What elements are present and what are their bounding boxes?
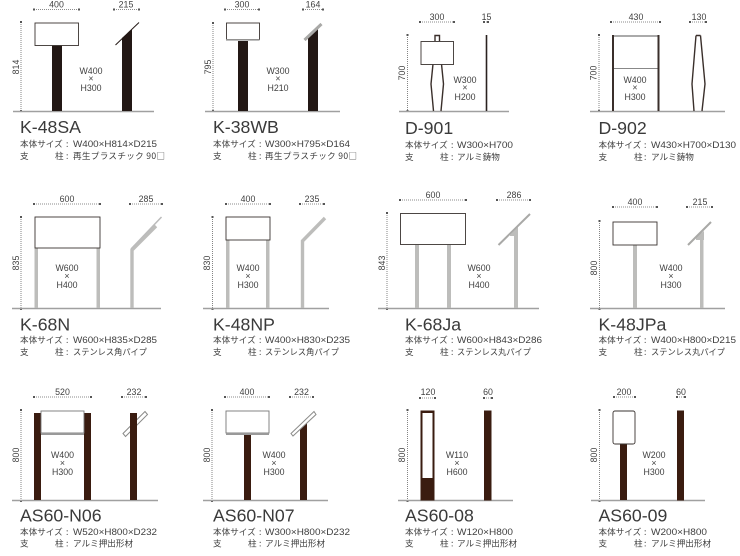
front and side drawing	[205, 23, 340, 112]
specifications: 支	[20, 150, 29, 162]
specifications: 支	[405, 346, 414, 358]
specifications	[213, 526, 350, 550]
model name: K-48NP	[213, 314, 275, 334]
specifications: 本体サイズ	[20, 334, 63, 346]
specifications: アルミ鋳物	[651, 151, 694, 163]
specifications	[20, 526, 157, 550]
model name: K-38WB	[213, 117, 279, 137]
size label	[267, 66, 290, 93]
size label	[51, 450, 74, 477]
dimension lines: 235	[305, 194, 319, 204]
model name: D-902	[598, 118, 647, 138]
size label	[446, 450, 468, 477]
dimension lines: 215	[693, 197, 707, 207]
specifications: :	[644, 151, 646, 163]
specifications: :	[66, 538, 68, 550]
specifications: 支	[598, 346, 608, 358]
size label: ×	[454, 458, 460, 468]
model name: K-68N	[20, 314, 70, 334]
size label: H300	[660, 280, 682, 290]
size label: H300	[237, 280, 259, 290]
specifications	[20, 138, 165, 162]
specifications: ステンレス丸パイプ	[651, 346, 725, 358]
size label: ×	[275, 74, 281, 84]
size label: ×	[668, 271, 674, 281]
specifications: W400×H830×D235	[265, 335, 350, 345]
dimension lines	[588, 12, 706, 111]
size label: H400	[56, 280, 78, 290]
dimension lines: 814	[11, 60, 21, 74]
specifications: :	[66, 526, 68, 538]
panel: AS60-N07	[202, 387, 350, 550]
specifications	[598, 334, 736, 358]
specifications	[405, 526, 517, 550]
specifications: 柱	[440, 538, 449, 550]
specifications: 本体サイズ	[598, 139, 642, 151]
specifications: W300×H700	[457, 140, 513, 150]
size label: W600	[56, 263, 79, 273]
specifications: 本体サイズ	[598, 334, 642, 346]
size label	[643, 450, 666, 477]
specifications: W600×H835×D285	[73, 335, 157, 345]
size label: H300	[624, 92, 646, 102]
dimension lines: 700	[588, 66, 598, 80]
dimension lines: 400	[241, 194, 255, 204]
front and side drawing	[12, 217, 162, 308]
specifications: 支	[405, 151, 414, 163]
specifications: 本体サイズ	[405, 526, 448, 538]
size label: ×	[245, 271, 251, 281]
dimension lines: 285	[139, 194, 153, 204]
model name: K-48SA	[20, 117, 81, 137]
specifications: 支	[405, 538, 414, 550]
size label: W400	[263, 450, 286, 460]
dimension lines: 130	[692, 12, 706, 22]
dimension lines	[397, 12, 491, 111]
specifications: W120×H800	[457, 527, 513, 537]
size label	[468, 263, 491, 290]
panel: K-68N	[11, 194, 162, 358]
specifications: アルミ押出形材	[457, 538, 517, 550]
specifications	[20, 334, 157, 358]
dimension lines: 232	[294, 387, 309, 397]
specifications: ステンレス角パイプ	[73, 346, 147, 358]
dimension lines	[397, 387, 493, 501]
specifications: 柱	[55, 150, 64, 162]
size label: ×	[462, 82, 468, 92]
specifications: :	[259, 334, 261, 346]
specifications: ステンレス角パイプ	[265, 346, 339, 358]
specifications: :	[644, 346, 646, 358]
specifications: 柱	[248, 346, 257, 358]
dimension lines: 835	[11, 256, 21, 270]
front and side drawing	[12, 411, 158, 500]
specifications: :	[451, 334, 453, 346]
specifications: W400×H800×D215	[651, 335, 736, 345]
dimension lines: 430	[629, 12, 643, 22]
specifications: :	[66, 334, 68, 346]
dimension lines: 600	[60, 194, 74, 204]
size label: H600	[446, 467, 468, 477]
specifications: :	[259, 346, 261, 358]
dimension lines: 15	[482, 12, 491, 22]
dimension lines: 300	[430, 12, 444, 22]
size label	[237, 263, 260, 290]
dimension lines	[11, 194, 162, 309]
specifications: W300×H800×D232	[265, 527, 350, 537]
size label: H210	[267, 83, 289, 93]
size label: H300	[263, 467, 285, 477]
specifications: 支	[598, 151, 608, 163]
specifications: 本体サイズ	[20, 138, 63, 150]
specifications	[213, 138, 357, 162]
specifications: 支	[213, 346, 222, 358]
dimension lines: 795	[203, 60, 213, 74]
dimension lines: 120	[421, 387, 435, 397]
size label: ×	[64, 271, 70, 281]
specifications: 再生プラスチック 90□	[265, 150, 357, 162]
specifications: :	[259, 150, 261, 162]
specifications: :	[451, 538, 453, 550]
dimension lines: 286	[507, 190, 521, 200]
dimension lines: 843	[377, 256, 387, 270]
size label: H300	[80, 83, 102, 93]
model name: AS60-N06	[20, 506, 102, 526]
specifications: 支	[598, 538, 608, 550]
size label: H200	[454, 92, 476, 102]
specifications: 柱	[440, 346, 449, 358]
size label	[624, 75, 647, 102]
size label	[80, 66, 103, 93]
dimension lines	[11, 387, 146, 501]
front and side drawing	[398, 410, 513, 500]
dimension lines: 232	[127, 387, 141, 397]
specifications	[405, 334, 542, 358]
specifications: W600×H843×D286	[457, 335, 542, 345]
specifications	[213, 334, 350, 358]
size label: ×	[651, 458, 657, 468]
specifications: 本体サイズ	[213, 334, 256, 346]
dimension lines	[202, 387, 313, 501]
size label: ×	[632, 82, 638, 92]
specifications: 本体サイズ	[213, 526, 256, 538]
specifications: :	[259, 138, 261, 150]
dimension lines: 800	[589, 448, 599, 462]
specifications: 柱	[634, 538, 643, 550]
panel: K-48JPa	[589, 197, 736, 358]
size label: W400	[80, 66, 103, 76]
front and side drawing	[203, 411, 328, 500]
size label: W300	[267, 66, 290, 76]
specifications: W430×H700×D130	[651, 140, 736, 150]
specifications: アルミ押出形材	[651, 538, 711, 550]
size label: W200	[643, 450, 666, 460]
dimension lines: 400	[628, 197, 642, 207]
panel: K-38WB	[203, 0, 357, 162]
specifications: 支	[213, 150, 222, 162]
specifications: W300×H795×D164	[265, 139, 350, 149]
dimension lines: 200	[617, 387, 631, 397]
specifications: 柱	[634, 151, 643, 163]
specifications: 柱	[248, 150, 257, 162]
front and side drawing	[591, 410, 705, 500]
model name: AS60-09	[598, 506, 667, 526]
specifications: :	[451, 151, 453, 163]
size label: ×	[88, 74, 94, 84]
specifications: 支	[213, 538, 222, 550]
specifications: アルミ押出形材	[265, 538, 325, 550]
specifications: :	[644, 139, 646, 151]
front and side drawing	[399, 35, 509, 112]
size label: H300	[52, 467, 73, 477]
dimension lines: 800	[589, 261, 599, 275]
specifications	[598, 139, 736, 163]
dimension lines: 60	[676, 387, 686, 397]
size label	[263, 450, 286, 477]
size label	[660, 263, 683, 290]
specifications: 柱	[634, 346, 643, 358]
size label: ×	[476, 271, 482, 281]
specifications: :	[259, 526, 261, 538]
model name: K-68Ja	[405, 314, 461, 334]
specifications: :	[644, 526, 646, 538]
panel: AS60-N06	[11, 387, 158, 550]
specifications	[598, 526, 711, 550]
model name: K-48JPa	[598, 314, 667, 334]
size label: W400	[237, 263, 260, 273]
model name: D-901	[405, 118, 453, 138]
specifications: 本体サイズ	[213, 138, 256, 150]
dimension lines: 830	[202, 256, 212, 270]
size label: W110	[446, 450, 468, 460]
size label: W400	[660, 263, 683, 273]
size label: W300	[454, 75, 477, 85]
panel: K-48SA	[11, 0, 165, 162]
specifications	[405, 139, 513, 163]
specifications: 柱	[440, 151, 449, 163]
specifications: 支	[20, 346, 29, 358]
specifications: 柱	[55, 538, 64, 550]
dimension lines	[203, 0, 323, 111]
specifications: アルミ鋳物	[457, 151, 500, 163]
dimension lines: 800	[11, 448, 21, 462]
specifications: :	[451, 526, 453, 538]
front and side drawing	[590, 35, 725, 112]
panel: AS60-08	[397, 387, 517, 550]
specifications: ステンレス丸パイプ	[457, 346, 531, 358]
specifications: W520×H800×D232	[73, 527, 157, 537]
dimension lines: 600	[426, 190, 440, 200]
dimension lines: 800	[397, 448, 407, 462]
specifications: :	[644, 334, 646, 346]
size label: W400	[51, 450, 74, 460]
dimension lines	[202, 194, 324, 309]
specifications: :	[66, 150, 68, 162]
dimension lines: 400	[240, 387, 254, 397]
size label: H300	[643, 467, 665, 477]
specifications: 柱	[248, 538, 257, 550]
model name: AS60-08	[405, 506, 474, 526]
specifications: 再生プラスチック 90□	[73, 150, 165, 162]
specifications: :	[644, 538, 646, 550]
size label: ×	[271, 458, 277, 468]
specifications: W400×H814×D215	[73, 139, 157, 149]
dimension lines: 60	[483, 387, 493, 397]
size label: H400	[468, 280, 490, 290]
specifications: 本体サイズ	[598, 526, 642, 538]
specifications: :	[451, 139, 453, 151]
dimension lines	[11, 0, 139, 111]
dimension lines: 520	[55, 387, 70, 397]
size label: ×	[60, 458, 65, 468]
specifications: W200×H800	[651, 527, 707, 537]
dimension lines: 700	[397, 66, 407, 80]
panel: K-48NP	[202, 194, 350, 358]
panel: D-902	[588, 12, 736, 163]
dimension lines	[589, 387, 686, 501]
front and side drawing	[590, 222, 725, 308]
specifications: アルミ押出形材	[73, 538, 133, 550]
specifications: :	[451, 346, 453, 358]
front and side drawing	[378, 214, 539, 308]
front and side drawing	[203, 217, 329, 308]
size label	[56, 263, 79, 290]
specifications: :	[66, 138, 68, 150]
specifications: :	[66, 346, 68, 358]
model name: AS60-N07	[213, 506, 295, 526]
specifications: 本体サイズ	[405, 334, 448, 346]
front and side drawing	[13, 22, 154, 112]
panel: K-68Ja	[377, 190, 542, 358]
specifications: 本体サイズ	[405, 139, 448, 151]
size label: W600	[468, 263, 491, 273]
specifications: 本体サイズ	[20, 526, 63, 538]
dimension lines	[377, 190, 530, 309]
size label	[454, 75, 477, 102]
panel: AS60-09	[589, 387, 711, 550]
panel: D-901	[397, 12, 513, 163]
dimension lines	[589, 197, 712, 309]
dimension lines: 800	[202, 448, 212, 462]
specifications: :	[259, 538, 261, 550]
specifications: 支	[20, 538, 29, 550]
size label: W400	[624, 75, 647, 85]
specifications: 柱	[55, 346, 64, 358]
